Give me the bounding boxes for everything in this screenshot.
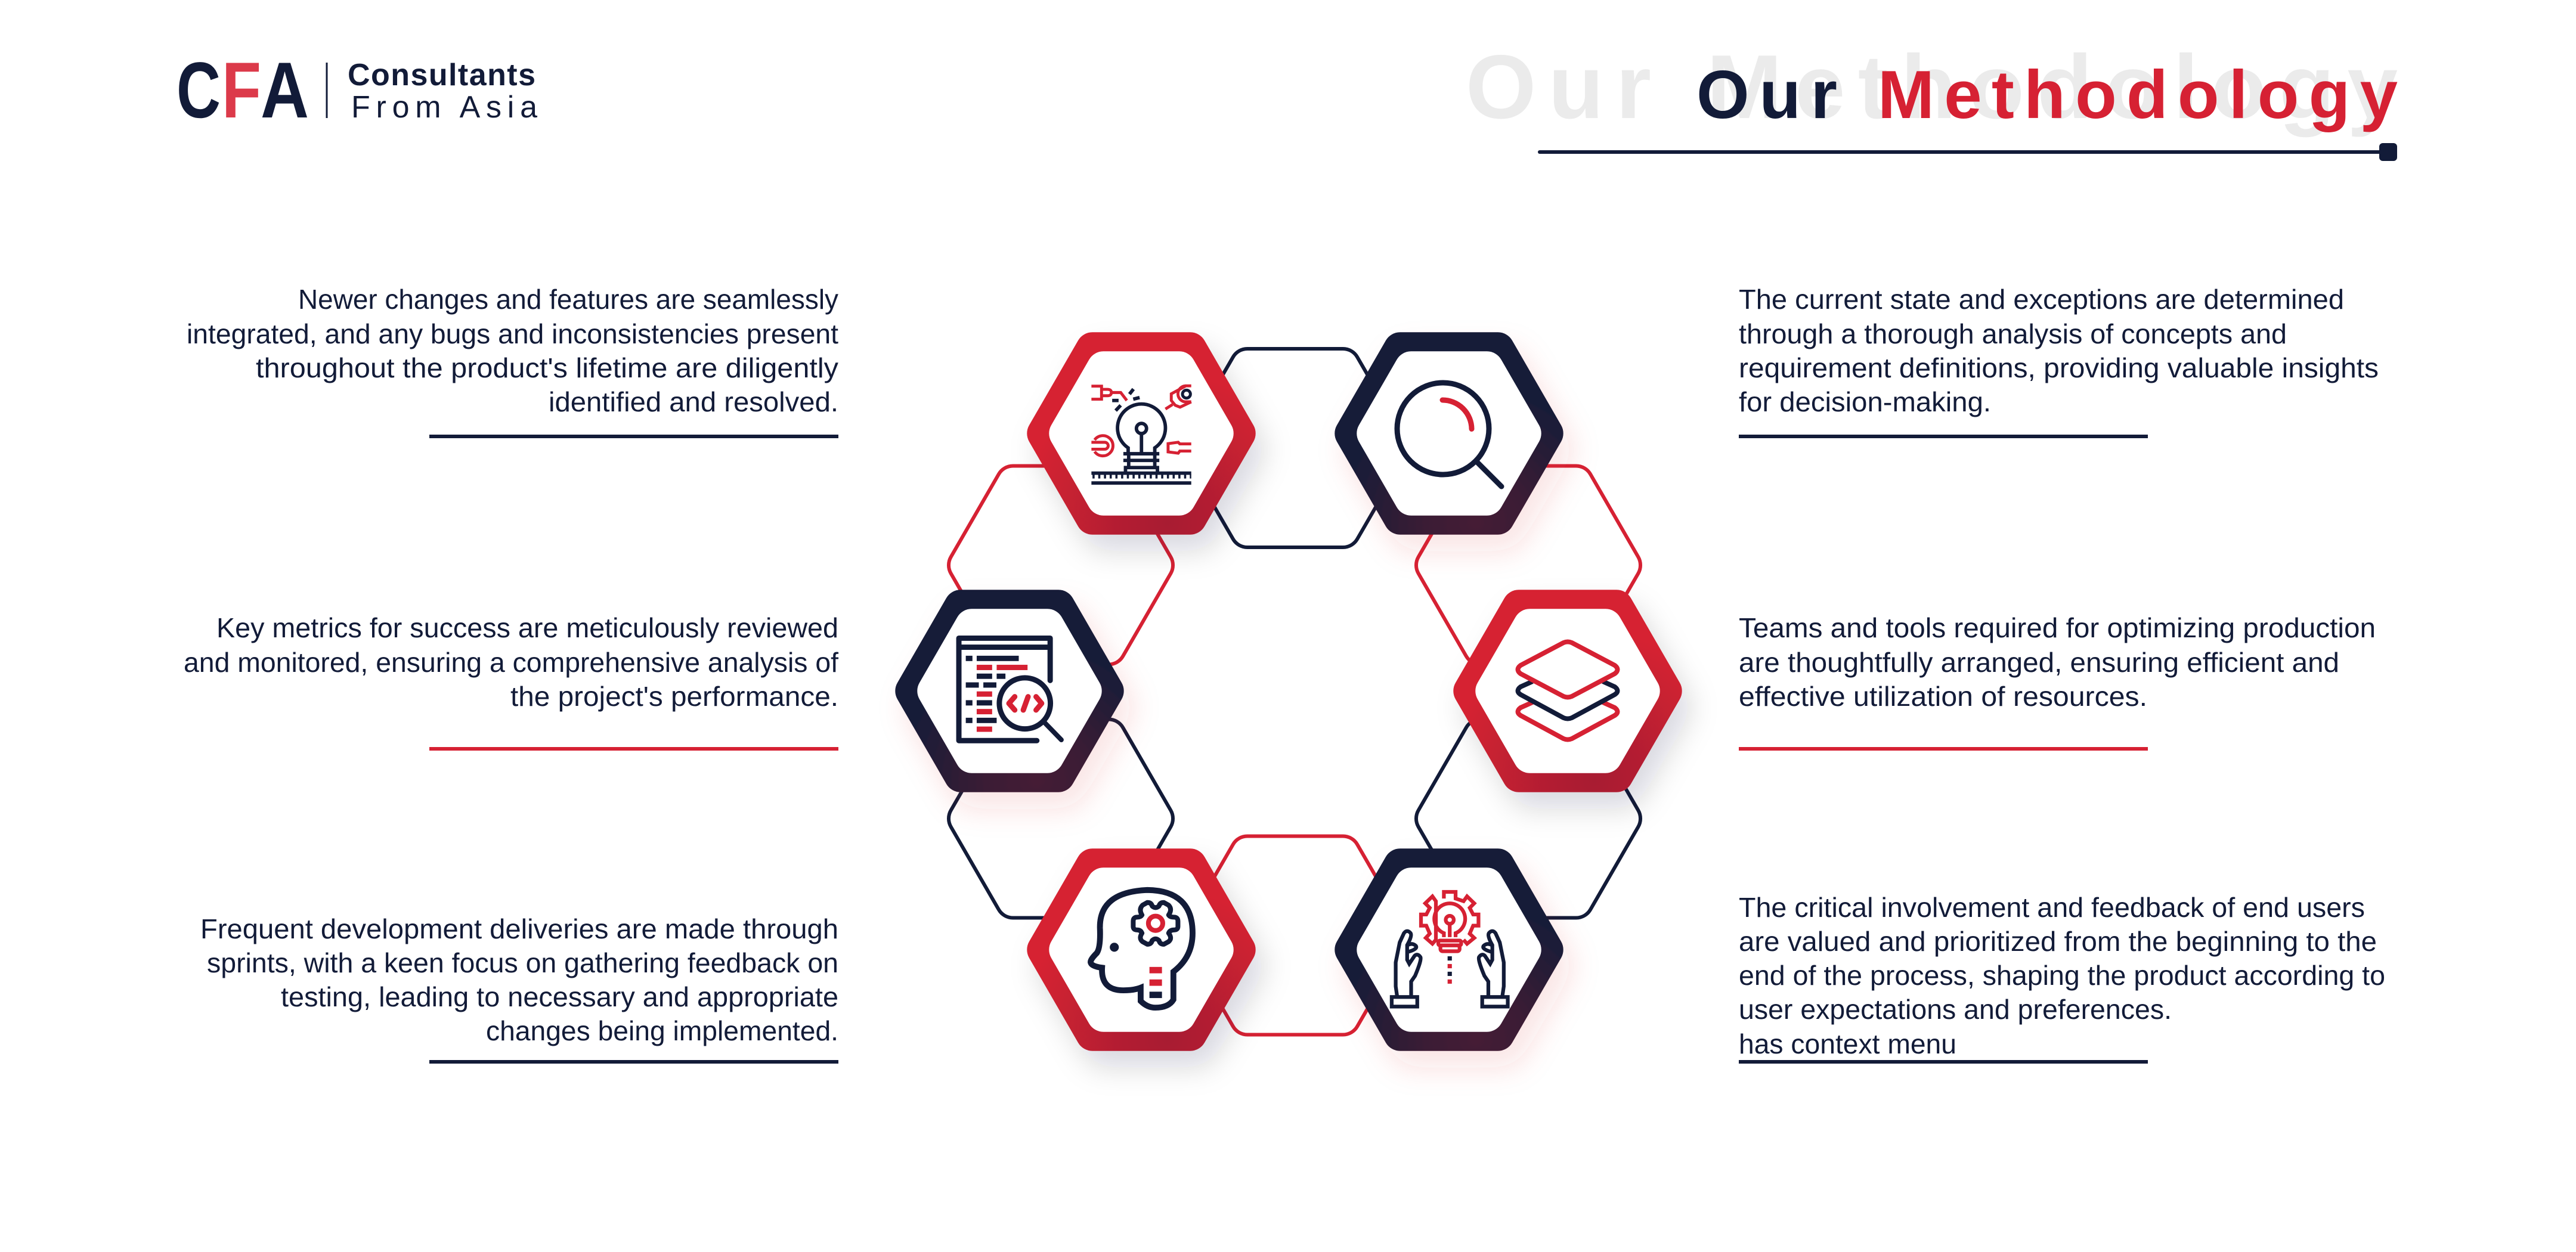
thin connector hexagon: bottom bbox=[1183, 836, 1407, 1035]
logo mark CFA: A bbox=[261, 47, 309, 135]
thin connector hexagon: top bbox=[1183, 349, 1407, 547]
text block: top right, analysis bbox=[1739, 284, 2379, 438]
logo wordmark bbox=[348, 58, 537, 125]
icon: layers bbox=[1518, 642, 1617, 739]
title: Our Methodology: Methodology bbox=[1707, 36, 2398, 138]
logo wordmark: From Asia bbox=[351, 90, 537, 125]
icon: lightbulb with robotic grippers bbox=[1091, 386, 1191, 483]
logo wordmark: Consultants bbox=[348, 58, 535, 92]
logo mark CFA: F bbox=[222, 47, 261, 135]
text block: bottom left, sprints: Frequent development deliveries are made through bbox=[200, 913, 838, 944]
logo bbox=[177, 47, 537, 135]
text block: middle left, metrics: the project's performance. bbox=[510, 681, 838, 712]
text block: top right, analysis: for decision-making. bbox=[1739, 386, 1991, 417]
text block: middle left, metrics bbox=[184, 612, 838, 751]
hexagon badge: hands and idea (dark, bottom right) bbox=[1335, 848, 1563, 1051]
text block: bottom left, sprints: changes being implemented. bbox=[486, 1015, 838, 1046]
icon: magnifying glass bbox=[1397, 383, 1501, 486]
title: Our Methodology: Our bbox=[1696, 57, 1837, 133]
icon: head with gear bbox=[1091, 890, 1193, 1008]
text block: bottom right, end users bbox=[1739, 892, 2385, 1064]
icon: hands with gear lightbulb bbox=[1392, 892, 1508, 1006]
thin connector hexagon: lower left bbox=[949, 719, 1173, 918]
text block: top right, analysis: The current state and exceptions are determined bbox=[1739, 284, 2344, 315]
text block: top left, maintenance: Newer changes and features are seamlessly bbox=[298, 284, 838, 315]
text block: top left, maintenance bbox=[187, 284, 838, 438]
title: Our Methodology: Our bbox=[1466, 36, 1651, 138]
text block: bottom right, end users: end of the process, shaping the product according to bbox=[1739, 960, 2385, 991]
text block: top left, maintenance: integrated, and any bugs and inconsistencies present bbox=[187, 318, 838, 349]
logo mark CFA: C bbox=[177, 47, 221, 135]
text block: top left, maintenance: identified and resolved. bbox=[549, 386, 838, 417]
text block: top right, analysis: through a thorough analysis of concepts and bbox=[1739, 318, 2287, 349]
hexagon badge: lightbulb prototype (red, top left) bbox=[1027, 332, 1256, 535]
text block: middle right, resources: Teams and tools required for optimizing production bbox=[1739, 612, 2376, 643]
icon: code document with magnifier bbox=[959, 638, 1061, 740]
hexagon badge: code review (dark, left) bbox=[895, 590, 1124, 792]
text block: bottom left, sprints bbox=[200, 913, 838, 1064]
text block: middle right, resources bbox=[1739, 612, 2376, 751]
hexagon badge: layers (red, right) bbox=[1453, 590, 1682, 792]
hexagon badge: head with gear (red, bottom left) bbox=[1027, 848, 1256, 1051]
text block: middle left, metrics: Key metrics for success are meticulously reviewed bbox=[216, 612, 838, 643]
text block: bottom right, end users: has context menu bbox=[1739, 1028, 1956, 1059]
thin connector hexagon: upper left bbox=[949, 466, 1173, 664]
text block: top right, analysis: requirement definitions, providing valuable insights bbox=[1739, 352, 2379, 383]
text block: bottom right, end users: user expectations and preferences. bbox=[1739, 994, 2172, 1025]
text block: middle right, resources: are thoughtfully arranged, ensuring efficient and bbox=[1739, 647, 2339, 678]
text block: middle left, metrics: and monitored, ensuring a comprehensive analysis of bbox=[184, 647, 838, 678]
hexagon badge: search (dark, top right) bbox=[1335, 332, 1563, 535]
text block: bottom right, end users: The critical involvement and feedback of end users bbox=[1739, 892, 2365, 923]
text block: bottom left, sprints: testing, leading to necessary and appropriate bbox=[281, 981, 838, 1012]
title: Our Methodology: Methodology bbox=[1878, 57, 2398, 133]
title underline with end cap bbox=[1538, 143, 2397, 161]
thin connector hexagon: upper right bbox=[1416, 466, 1640, 664]
thin connector hexagon: lower right bbox=[1416, 719, 1640, 918]
text block: bottom right, end users: are valued and prioritized from the beginning to the bbox=[1739, 926, 2377, 957]
text block: middle right, resources: effective utilization of resources. bbox=[1739, 681, 2147, 712]
text block: top left, maintenance: throughout the product's lifetime are diligently bbox=[256, 352, 838, 383]
logo mark CFA bbox=[177, 47, 309, 135]
text block: bottom left, sprints: sprints, with a keen focus on gathering feedback on bbox=[207, 947, 838, 978]
